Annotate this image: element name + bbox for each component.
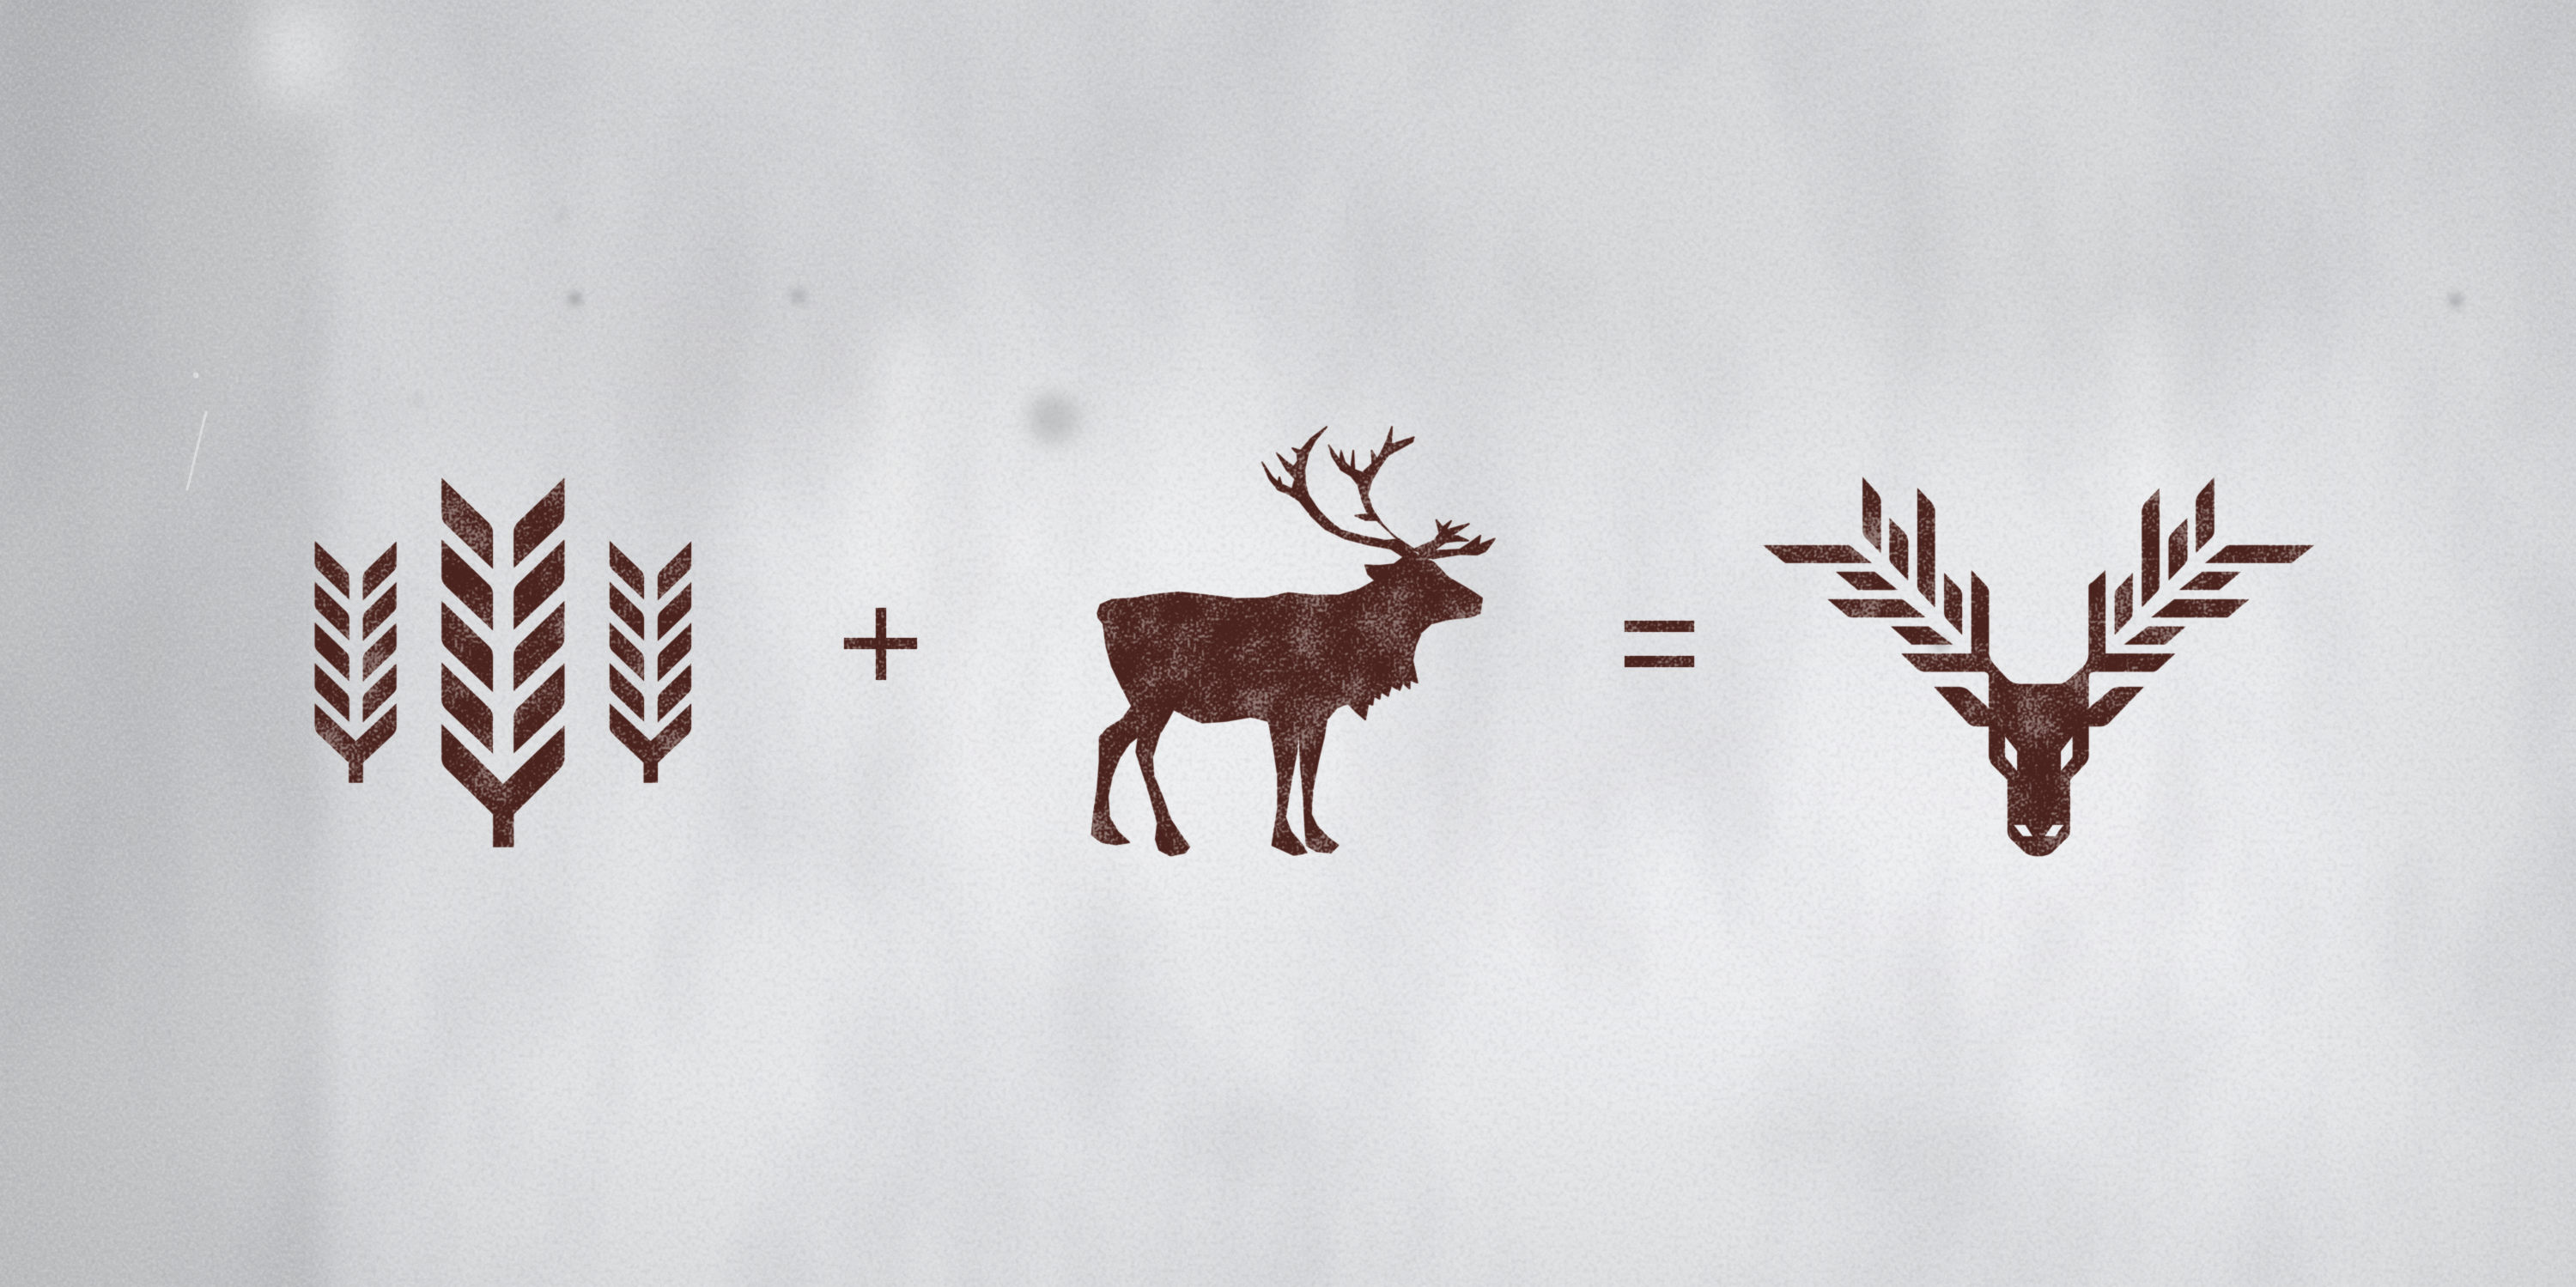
icon: right small wheat stalk xyxy=(610,541,691,783)
deer body xyxy=(1092,551,1482,856)
deer rear antler xyxy=(1262,427,1411,557)
icon: stag head logo made of wheat-like antlers xyxy=(1763,477,2314,856)
logo: left antler leaves xyxy=(1763,477,1962,645)
deer brow tines xyxy=(1415,520,1495,558)
icon: plus sign xyxy=(844,608,917,680)
icon: left small wheat stalk xyxy=(315,541,397,783)
logo: stag head with eyes and nostrils xyxy=(1901,570,2175,856)
equation artwork xyxy=(315,427,2314,856)
deer front antler xyxy=(1328,427,1417,551)
logo: right antler leaves xyxy=(2115,477,2314,645)
icon: centre large wheat stalk xyxy=(441,478,564,847)
icon: three wheat stalks xyxy=(315,478,691,847)
icon: equals sign xyxy=(1625,621,1694,667)
icon: reindeer silhouette xyxy=(1092,427,1495,856)
